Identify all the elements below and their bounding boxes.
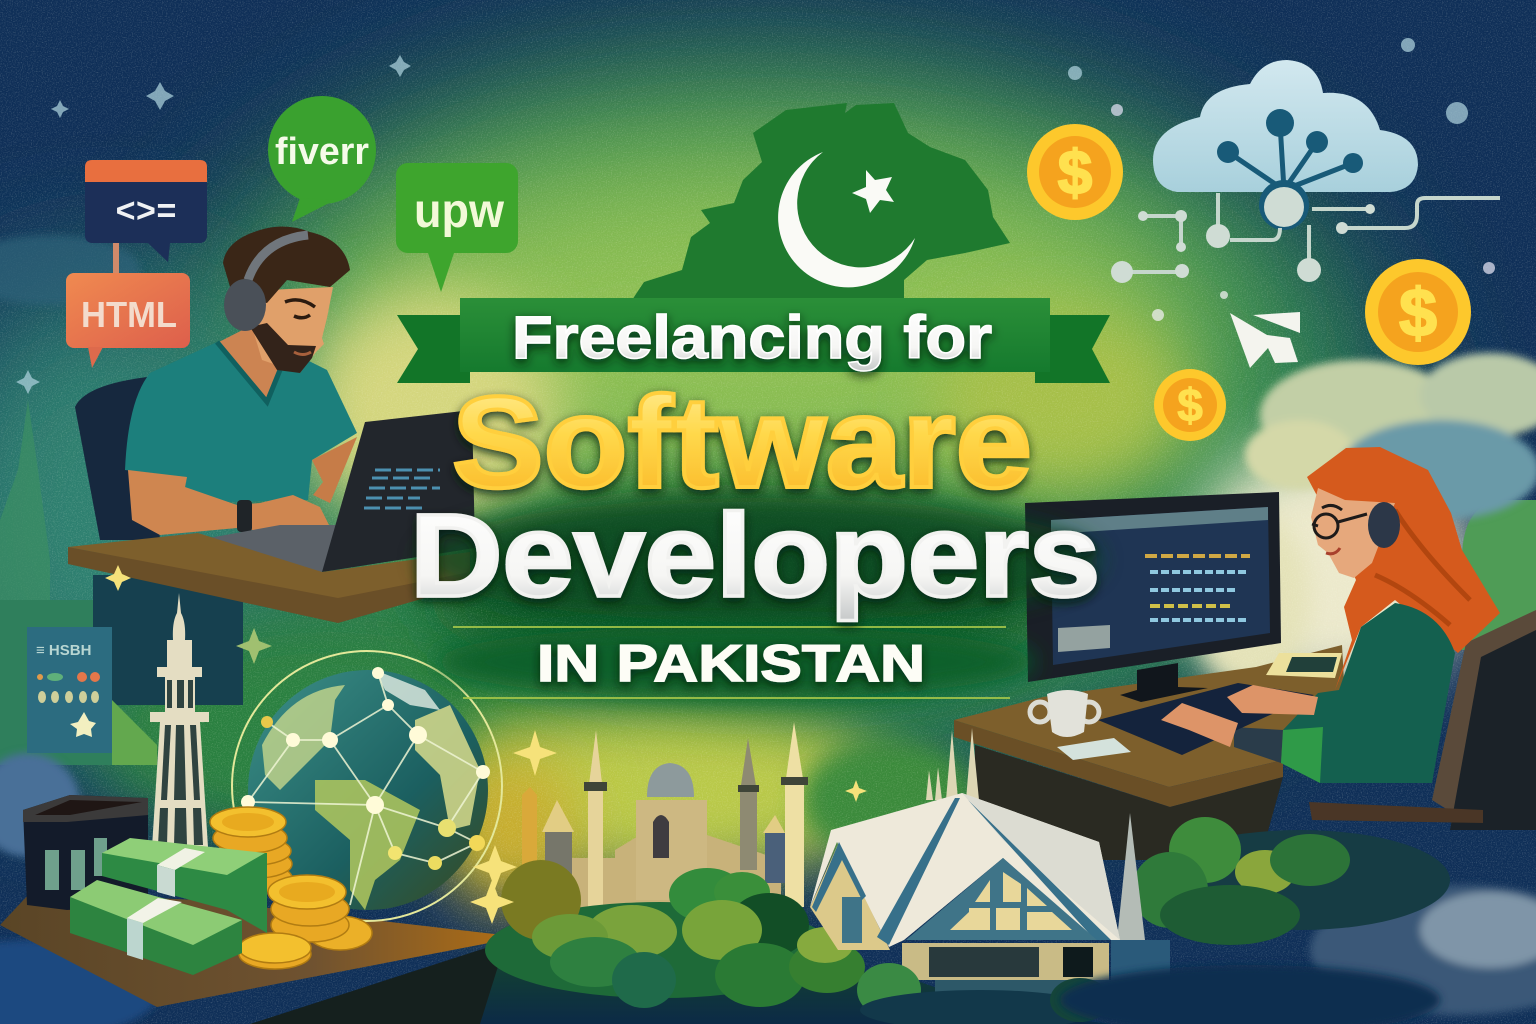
- background cream wash: [1190, 510, 1310, 690]
- dashboard screen: [27, 627, 112, 753]
- under desk shadow: [975, 745, 1283, 860]
- trees center: [480, 860, 1110, 1024]
- coin top: $: [1058, 139, 1092, 208]
- light circuit nodes: [1111, 187, 1375, 283]
- subtitle band: [435, 626, 1035, 698]
- upwork bubble: upw: [414, 185, 505, 238]
- background dark title field: [425, 485, 1065, 695]
- mug: [1030, 690, 1099, 737]
- background stars: [16, 38, 1495, 394]
- monitor stand: [1120, 663, 1208, 702]
- main block: [636, 800, 707, 900]
- arch window: [653, 815, 669, 858]
- face: [250, 287, 333, 373]
- cuff: [1281, 727, 1323, 783]
- background green lower left: [90, 610, 570, 850]
- upwork bubble: [396, 163, 518, 292]
- background yellow near title right: [930, 310, 1190, 490]
- front trees: [857, 963, 1110, 1024]
- rib sleeve: [1234, 727, 1283, 763]
- right minaret: [781, 722, 808, 907]
- title line 2: Software: [452, 369, 1032, 515]
- watch: [237, 500, 252, 532]
- Badshahi style mosque: [522, 722, 808, 910]
- sparkle stars: [105, 565, 867, 924]
- background lime glow: [310, 140, 1210, 520]
- ribbon right tail: [1035, 315, 1110, 383]
- tower silhouette: [150, 593, 209, 847]
- chair inner: [1450, 630, 1536, 830]
- Minar-e-Pakistan tower: [150, 593, 209, 847]
- eyebrow and eye: [285, 300, 315, 318]
- far left tower: [522, 787, 537, 870]
- beard: [250, 323, 316, 373]
- side pool: [1111, 940, 1170, 980]
- title line 1: Freelancing for: [512, 304, 992, 371]
- small dome right: [763, 815, 785, 883]
- background clouds: [0, 235, 1536, 1024]
- map silhouette: [632, 103, 1010, 300]
- cloud network icon: [1111, 60, 1500, 283]
- hair: [223, 226, 350, 303]
- fiverr bubble: fiverr: [275, 131, 369, 173]
- lower floor: [902, 943, 1109, 980]
- desk: [68, 533, 470, 623]
- background left teal glow: [0, 280, 310, 760]
- background lime lower center: [450, 700, 890, 880]
- code window bubble: <>=: [115, 195, 177, 233]
- ribbon left tail: [397, 315, 470, 383]
- connector: [113, 243, 119, 275]
- dark box: [23, 795, 148, 910]
- headset: [1368, 502, 1400, 548]
- bottom right of table shadow: [250, 937, 700, 1024]
- coin right: $: [1399, 275, 1437, 351]
- base wall: [572, 835, 781, 910]
- roof ribs: [812, 798, 1111, 945]
- continents: [262, 670, 480, 910]
- network nodes: [241, 667, 490, 870]
- left minaret: [584, 730, 607, 910]
- background green behind mosque: [800, 740, 980, 860]
- ribbon body: [460, 298, 1050, 372]
- side note panel: [1058, 625, 1110, 652]
- background left city silhouette: [0, 400, 243, 765]
- headphones: [224, 235, 308, 331]
- forearm: [128, 470, 330, 535]
- chair seat: [1309, 802, 1483, 823]
- minarets: [926, 728, 1145, 940]
- female developer at desk: [954, 447, 1536, 860]
- cash stack upper: [102, 838, 267, 933]
- cash stack lower: [70, 880, 242, 975]
- dark ground: [480, 950, 1110, 1024]
- small dome left: [542, 800, 574, 874]
- other arm: [312, 437, 357, 503]
- Faisal Mosque: [810, 728, 1170, 1012]
- code lines: [1145, 556, 1250, 620]
- bottom-left table: [0, 893, 520, 1007]
- crescent: [778, 152, 915, 287]
- torso: [125, 342, 357, 503]
- title ribbon: [397, 298, 1110, 383]
- note card: [1057, 738, 1131, 760]
- laptop: [198, 410, 475, 572]
- notebook: [1266, 653, 1342, 678]
- glasses: [1312, 505, 1367, 538]
- pool: [935, 980, 1170, 1012]
- dark network lines: [1228, 123, 1353, 190]
- left window: [842, 897, 862, 943]
- background gold near globe: [440, 750, 580, 910]
- right bushes: [1132, 817, 1450, 945]
- face: [1311, 488, 1395, 578]
- front triangle: [906, 858, 1097, 940]
- male developer at desk: [75, 226, 475, 572]
- floor windows: [929, 947, 1093, 977]
- hijab: [1307, 447, 1500, 690]
- monitor screen: [1051, 507, 1270, 665]
- monitor title bar: [1051, 507, 1268, 534]
- roof: [810, 793, 1120, 947]
- map of Pakistan with crescent and star: [632, 103, 1010, 300]
- dark network nodes: [1217, 109, 1363, 230]
- light circuit lines: [1122, 193, 1500, 272]
- gray minaret: [738, 738, 759, 870]
- background right green panel: [1462, 500, 1536, 650]
- dark glow behind developers text: [420, 498, 1100, 622]
- bottom haze: [1060, 965, 1440, 1024]
- coin stack short: [239, 875, 372, 969]
- coin top: [1027, 124, 1123, 220]
- keyboard: [1098, 683, 1314, 755]
- network lines: [248, 673, 483, 905]
- roof shading: [962, 793, 1120, 940]
- code window bubble: [85, 160, 207, 262]
- HTML bubble: [66, 273, 190, 368]
- background yellow near title left: [300, 290, 560, 530]
- HTML bubble: HTML: [81, 294, 177, 335]
- hijab folds: [1375, 510, 1470, 625]
- left wing: [810, 842, 890, 950]
- mouth: [294, 352, 311, 354]
- monitor frame: [1025, 492, 1281, 682]
- title block: [410, 304, 1100, 693]
- hands: [1161, 685, 1318, 747]
- collar: [217, 342, 280, 402]
- coin right: [1365, 259, 1471, 365]
- icon: paper plane cursor: [1230, 312, 1300, 368]
- coin stack tall: [210, 807, 292, 892]
- chair back: [1432, 610, 1536, 830]
- windows: [950, 872, 1072, 930]
- cloud: [1153, 60, 1418, 192]
- star: [852, 170, 894, 213]
- coin small: [1154, 369, 1226, 441]
- right desk top: [954, 645, 1345, 787]
- background green field: [150, 50, 1390, 790]
- monitor: [1025, 492, 1281, 702]
- dashboard screen: ≡ HSBH: [36, 642, 91, 659]
- background pale wall behind woman: [1190, 440, 1470, 700]
- globe ring: [232, 651, 502, 921]
- globe sphere: [248, 670, 488, 910]
- title line 3: Developers: [410, 490, 1100, 622]
- title line 4: IN PAKISTAN: [537, 635, 925, 693]
- globe: [232, 651, 502, 921]
- smile: [1326, 548, 1340, 554]
- neck: [217, 320, 300, 402]
- fiverr bubble: [268, 96, 376, 222]
- coin small: $: [1177, 379, 1203, 431]
- dome: [647, 763, 694, 797]
- chair: [75, 377, 160, 540]
- torso: [1281, 603, 1455, 783]
- tower dark panels: [158, 680, 203, 845]
- right desk front: [954, 720, 1283, 807]
